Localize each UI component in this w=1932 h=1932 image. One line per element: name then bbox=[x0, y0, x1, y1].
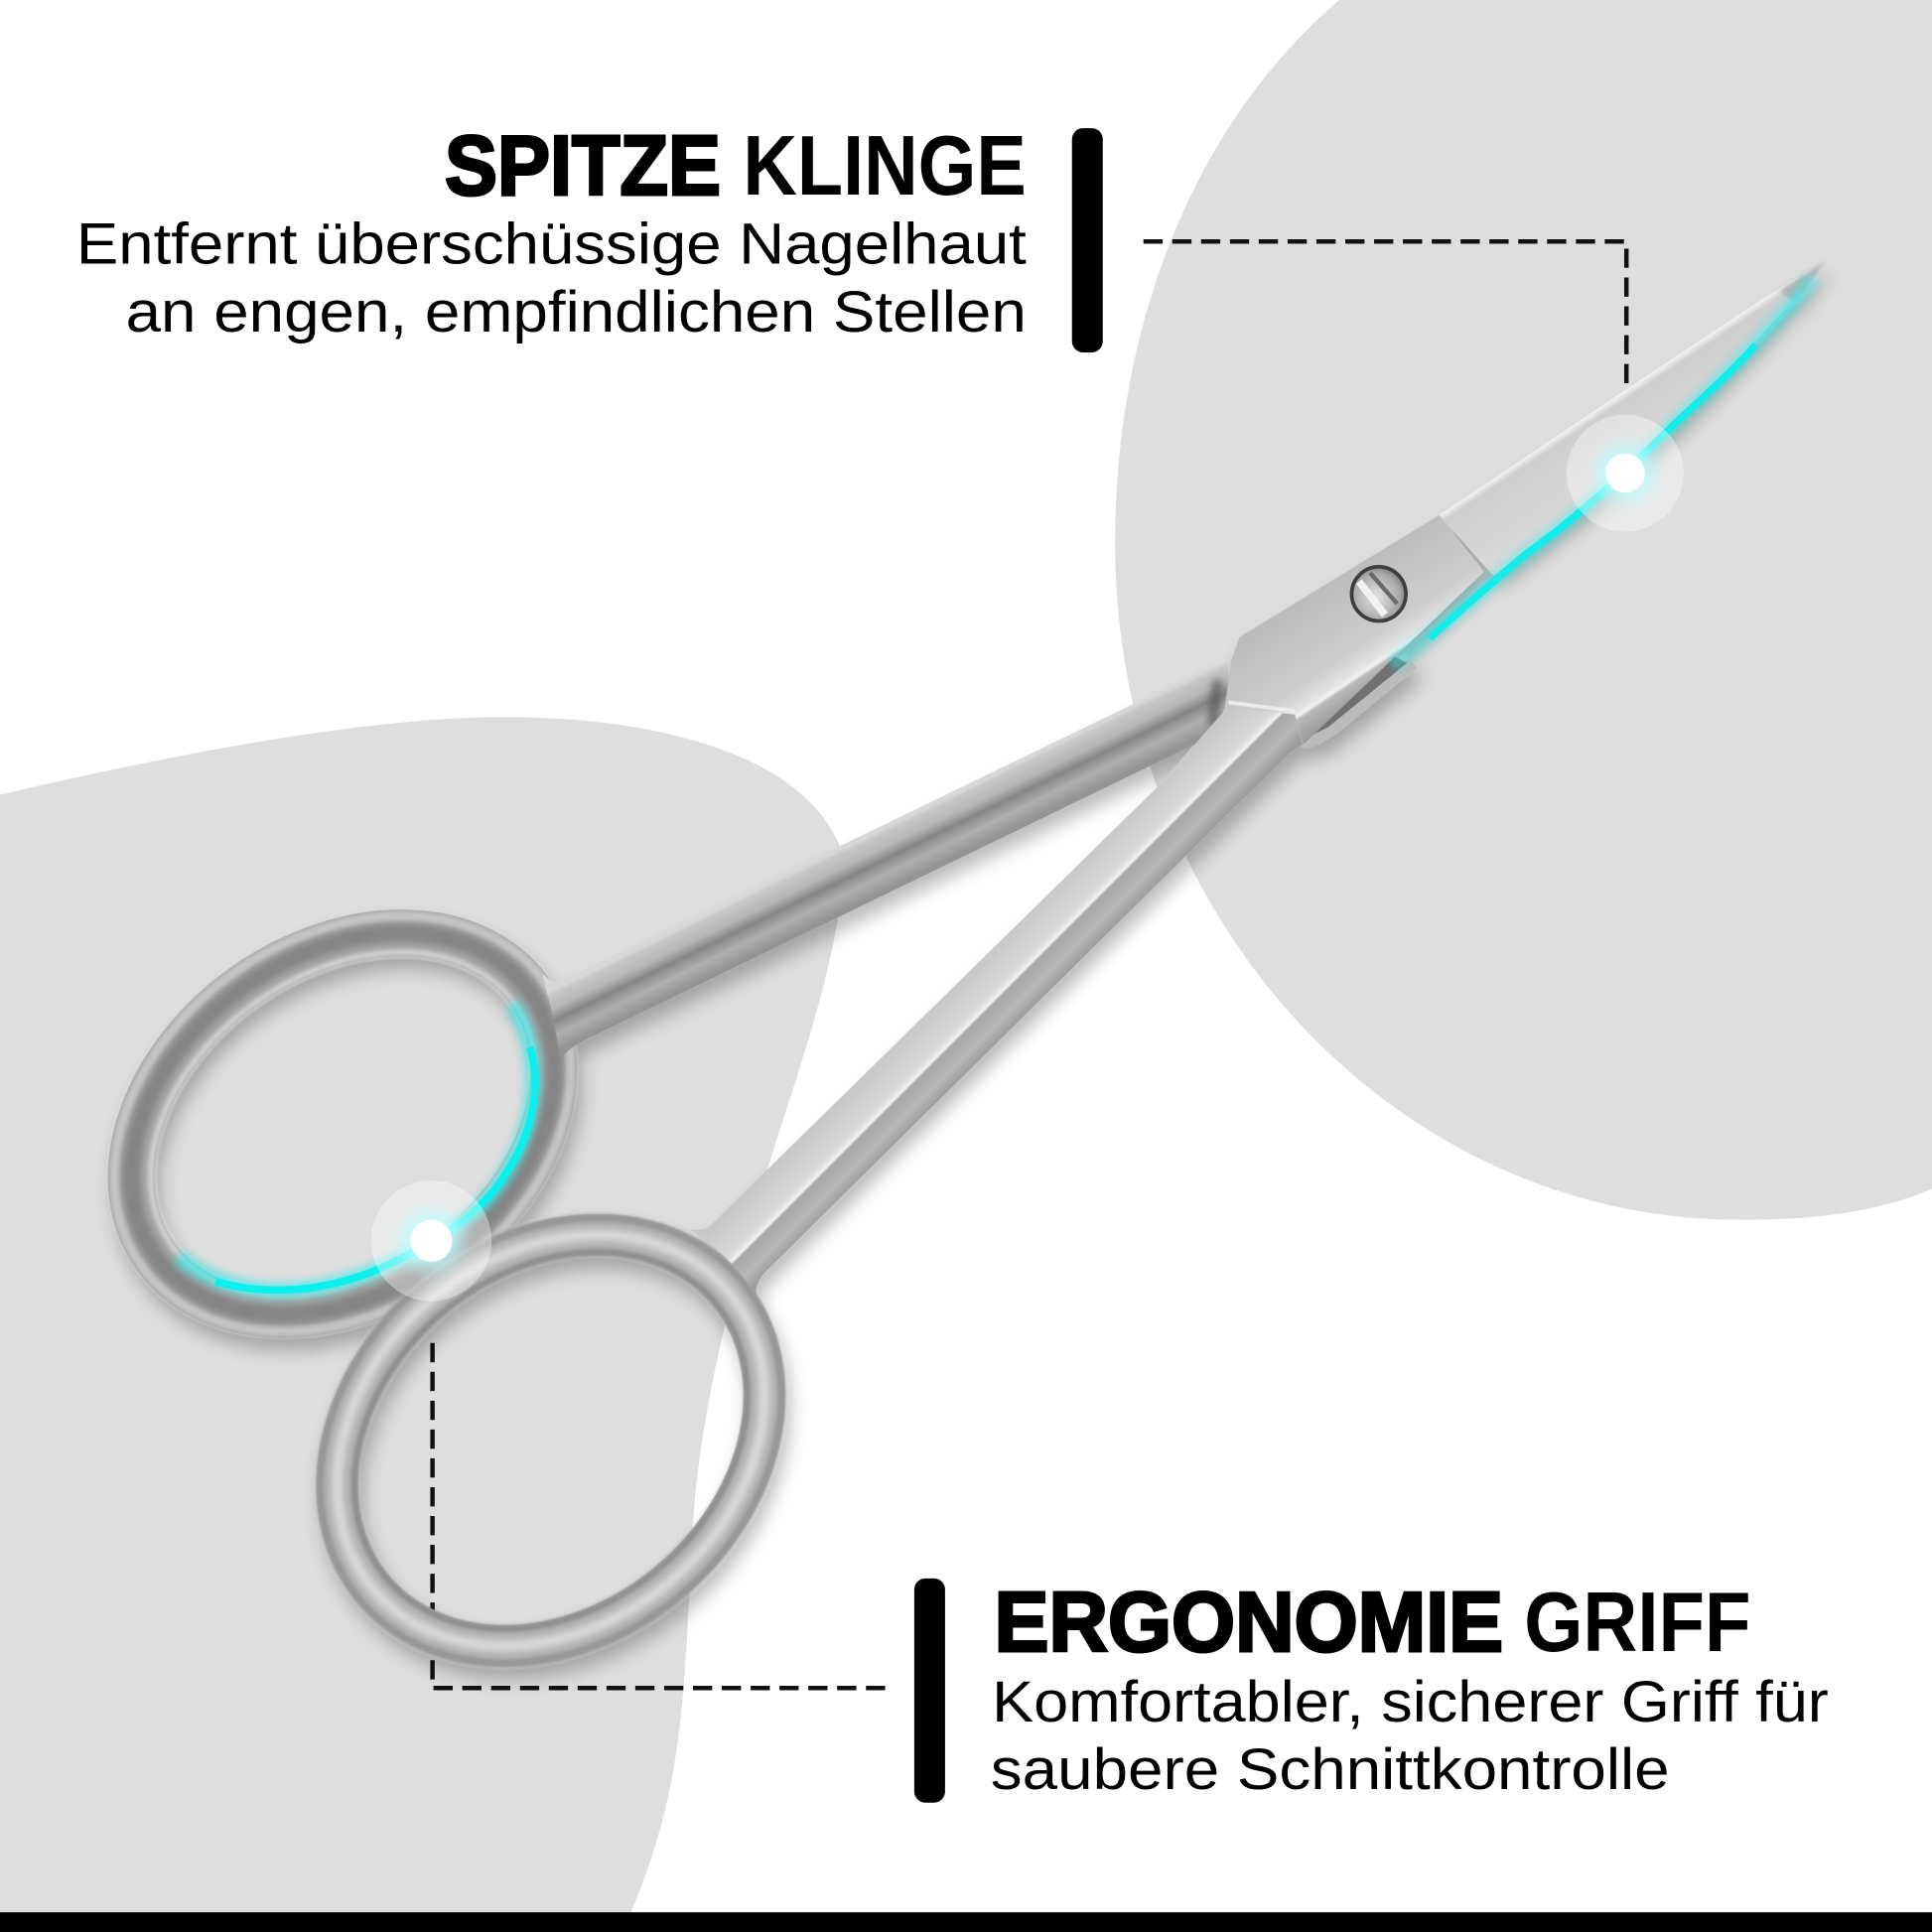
heading: ergonomie griff: GRIFF bbox=[1524, 1575, 1751, 1670]
upper finger ring bbox=[34, 830, 651, 1418]
background blob: bottom left bbox=[0, 717, 842, 1912]
callout text: handle bbox=[991, 1575, 1829, 1802]
accent bar: handle callout bbox=[914, 1579, 945, 1803]
upper blade bbox=[1440, 260, 1826, 576]
footer bar bbox=[0, 1912, 1932, 1932]
dashed connector: handle bbox=[433, 1343, 888, 1688]
heading: spitze klinge: KLINGE bbox=[743, 118, 1027, 213]
highlight marker: handle bbox=[371, 1180, 491, 1302]
highlight marker: blade bbox=[1567, 415, 1684, 532]
body text: handle: saubere Schnittkontrolle bbox=[991, 1737, 1670, 1802]
scissors body with shadow bbox=[34, 260, 1826, 1755]
lower finger ring bbox=[230, 1126, 872, 1755]
heading: spitze klinge: SPITZE bbox=[445, 118, 721, 213]
accent bar: blade callout bbox=[1072, 128, 1103, 352]
body text: handle bbox=[991, 1670, 1829, 1802]
plate facet line bbox=[1228, 702, 1295, 711]
dashed connector: blade bbox=[1144, 241, 1626, 389]
upper arm end shading bbox=[1212, 680, 1217, 725]
callout text: blade bbox=[76, 118, 1027, 345]
cyan edge glow: blade bbox=[1392, 278, 1814, 665]
heading: ergonomie griff bbox=[995, 1575, 1751, 1670]
upper arm bbox=[542, 660, 1230, 1059]
heading: ergonomie griff: ERGONOMIE bbox=[995, 1575, 1503, 1670]
body text: blade: an engen, empfindlichen Stellen bbox=[126, 280, 1027, 345]
scissors bbox=[34, 260, 1826, 1755]
lower blade behind plate bbox=[1302, 653, 1417, 748]
heading: spitze klinge bbox=[445, 118, 1027, 213]
cyan edge glow: ring bbox=[179, 1004, 535, 1291]
body text: blade: Entfernt überschüssige Nagelhaut bbox=[76, 212, 1027, 277]
lower arm bbox=[690, 707, 1303, 1297]
pivot plate bbox=[1225, 515, 1483, 745]
background blob: top right bbox=[1115, 0, 1932, 1220]
pivot screw bbox=[1351, 567, 1406, 621]
body text: handle: Komfortabler, sicherer Griff für bbox=[992, 1670, 1829, 1734]
body text: blade bbox=[76, 212, 1027, 345]
